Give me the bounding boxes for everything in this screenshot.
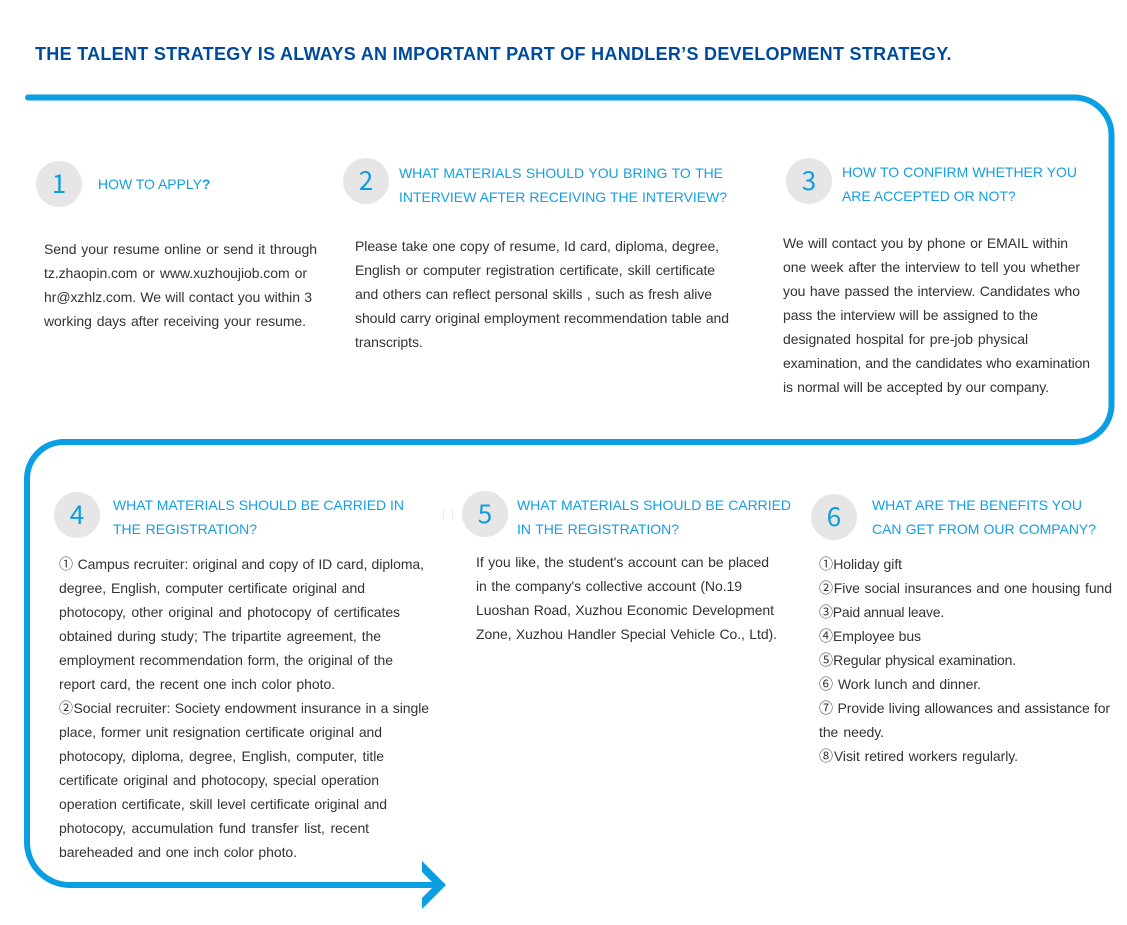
heading: step 3: ARE ACCEPTED OR NOT? (842, 188, 1016, 204)
heading: step 5: WHAT MATERIALS SHOULD BE CARRIED (517, 497, 791, 513)
text: step 4: operation certificate, skill level certificate original and (59, 796, 387, 812)
text: step 6: ①Holiday gift (819, 556, 902, 572)
text: step 4: obtained during study; The tripartite agreement, the (59, 628, 381, 644)
text: step 6: ⑥ Work lunch and dinner. (819, 676, 981, 692)
text: step 2: English or computer registration certificate, skill certificate (355, 262, 715, 278)
text: step 6: the needy. (819, 724, 884, 740)
text: step 3: designated hospital for pre-job physical (783, 331, 1028, 347)
icon: number 6: 6 (827, 497, 841, 534)
heading: step 2: WHAT MATERIALS SHOULD YOU BRING TO THE (399, 165, 723, 181)
icon: number 6 (811, 494, 857, 540)
heading: step 3 (842, 164, 1077, 204)
text: step 4: bareheaded and one inch color photo. (59, 844, 297, 860)
heading: step 6 (872, 497, 1096, 537)
text: step 4: degree, English, computer certificate original and (59, 580, 365, 596)
panel: step 5 (462, 491, 791, 642)
text: step 4: photocopy, accumulation fund transfer list, recent (59, 820, 369, 836)
text: step 4: place, former unit resignation certificate original and (59, 724, 382, 740)
icon: number 5: 5 (478, 494, 492, 531)
panel: step 6 (811, 494, 1112, 764)
text: step 5: If you like, the student's account can be placed (476, 554, 769, 570)
text: step 6 (819, 556, 1112, 764)
text: step 2: Please take one copy of resume, Id card, diploma, degree, (355, 238, 719, 254)
text: step 4 (59, 556, 429, 860)
icon: number 4 (54, 492, 100, 538)
text: step 6: ⑧Visit retired workers regularly. (819, 748, 1018, 764)
heading: step 5 (517, 497, 791, 537)
text: step 3: We will contact you by phone or EMAIL within (783, 235, 1068, 251)
text: step 6: ⑦ Provide living allowances and assistance for (819, 700, 1110, 716)
panel: step 4 (54, 492, 429, 860)
text: step 4: ① Campus recruiter: original and copy of ID card, diploma, (59, 556, 424, 572)
icon: number 1 (36, 161, 82, 207)
text: step 4: photocopy, other original and photocopy of certificates (59, 604, 400, 620)
panel: step 2 (343, 158, 729, 350)
text: step 3: is normal will be accepted by our company. (783, 379, 1049, 395)
text: step 5: Zone, Xuzhou Handler Special Vehicle Co., Ltd). (476, 626, 777, 642)
heading: step 3: HOW TO CONFIRM WHETHER YOU (842, 164, 1077, 180)
text: step 4: photocopy, diploma, degree, English, computer, title (59, 748, 384, 764)
text: step 3: pass the interview will be assigned to the (783, 307, 1038, 323)
text: step 4: ②Social recruiter: Society endowment insurance in a single (59, 700, 429, 716)
text: step 3: one week after the interview to tell you whether (783, 259, 1080, 275)
heading: step 5: IN THE REGISTRATION? (517, 521, 679, 537)
icon: number 4: 4 (70, 495, 84, 532)
text: step 5 (476, 554, 777, 642)
panel: step 3 (783, 158, 1090, 395)
text: step 1: hr@xzhlz.com. We will contact you within 3 (44, 289, 312, 305)
icon: number 5 (462, 491, 508, 537)
heading: step 4 (113, 497, 404, 537)
heading: step 4: THE REGISTRATION? (113, 521, 257, 537)
text: step 1 (44, 241, 317, 329)
text: step 4: employment recommendation form, the original of the (59, 652, 393, 668)
text: step 4: certificate original and photocopy, special operation (59, 772, 379, 788)
title: THE TALENT STRATEGY IS ALWAYS AN IMPORTANT PART OF HANDLER’S DEVELOPMENT STRATEGY. (35, 44, 952, 64)
panel: step 1 (36, 161, 317, 329)
text: step 3: you have passed the interview. Candidates who (783, 283, 1080, 299)
heading: step 1: HOW TO APPLY? (98, 176, 210, 192)
text: step 6: ②Five social insurances and one housing fund (819, 580, 1112, 596)
text: step 6: ④Employee bus (819, 628, 921, 644)
icon: number 3: 3 (802, 161, 816, 198)
text: step 5: Luoshan Road, Xuzhou Economic Development (476, 602, 774, 618)
text: step 5: in the company's collective account (No.19 (476, 578, 742, 594)
text: step 2: transcripts. (355, 334, 423, 350)
heading: step 2 (399, 165, 727, 205)
text: step 1: tz.zhaopin.com or www.xuzhoujiob.com or (44, 265, 307, 281)
text: step 1: Send your resume online or send it through (44, 241, 317, 257)
text: step 3: examination, and the candidates who examination (783, 355, 1090, 371)
text: step 6: ③Paid annual leave. (819, 604, 944, 620)
text: step 2: should carry original employment recommendation table and (355, 310, 729, 326)
heading: step 2: INTERVIEW AFTER RECEIVING THE INTERVIEW? (399, 189, 727, 205)
text: step 2 (355, 238, 729, 350)
heading: step 6: WHAT ARE THE BENEFITS YOU (872, 497, 1082, 513)
icon: number 2 (343, 158, 389, 204)
icon: number 2: 2 (359, 161, 373, 198)
text: step 6: ⑤Regular physical examination. (819, 652, 1016, 668)
text: step 3 (783, 235, 1090, 395)
icon: number 1: 1 (52, 164, 66, 201)
icon: number 3 (786, 158, 832, 204)
text: step 4: report card, the recent one inch color photo. (59, 676, 335, 692)
text: step 1: working days after receiving your resume. (44, 313, 306, 329)
heading: step 4: WHAT MATERIALS SHOULD BE CARRIED IN (113, 497, 404, 513)
text: step 2: and others can reflect personal skills , such as fresh alive (355, 286, 712, 302)
heading: step 6: CAN GET FROM OUR COMPANY? (872, 521, 1096, 537)
